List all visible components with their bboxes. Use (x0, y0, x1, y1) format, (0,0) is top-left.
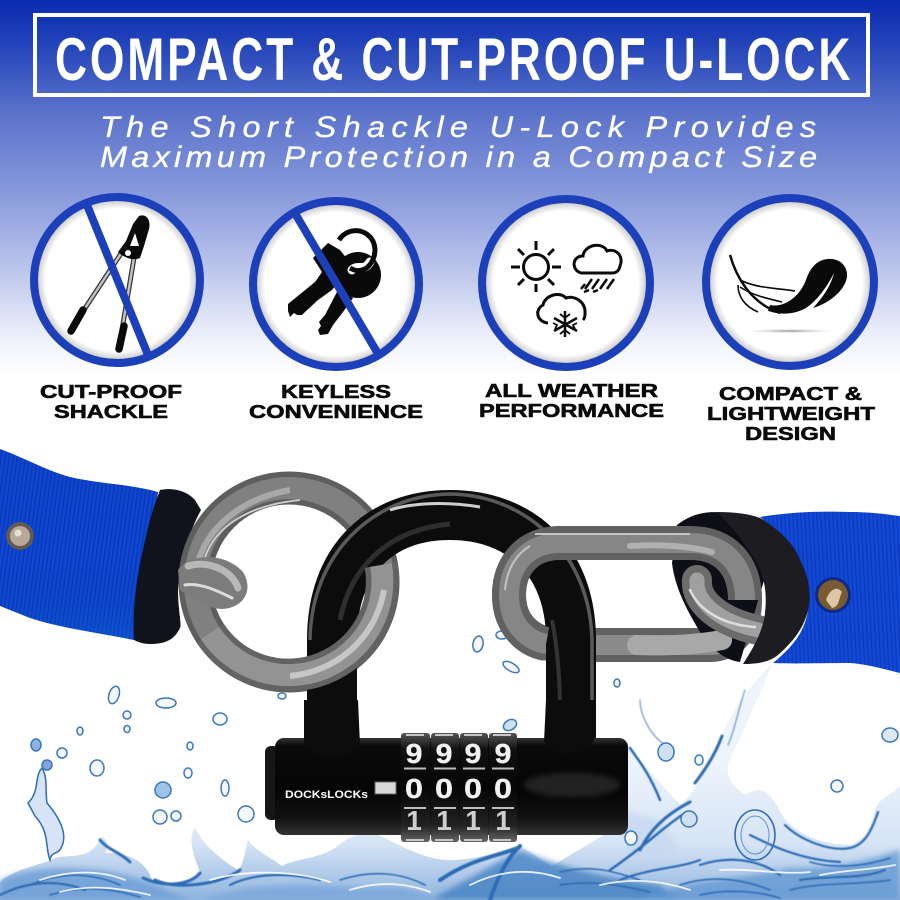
right rivet (815, 577, 851, 613)
background gradient (0, 0, 900, 375)
dial digits: 0 (435, 773, 453, 804)
dial digits: 9 (494, 738, 512, 769)
icon: rain cloud (574, 245, 621, 292)
dial digits: 0 (464, 773, 482, 804)
dials (401, 733, 517, 842)
water droplets (31, 631, 898, 845)
label: cut-proof shackle (40, 382, 182, 422)
label: all weather performance: PERFORMANCE (479, 401, 664, 421)
label: cut-proof shackle: CUT-PROOF (40, 382, 182, 402)
dial digits: 1 (465, 805, 481, 836)
right black cuff, front (717, 512, 810, 664)
left black cuff (133, 489, 201, 644)
water splash (0, 664, 900, 900)
label: compact and lightweight design: DESIGN (745, 424, 836, 444)
dial digits: 0 (494, 773, 512, 804)
icon: feather (706, 198, 874, 366)
dial digits (405, 738, 512, 836)
deep water tones (0, 810, 900, 900)
left rivet (6, 522, 34, 550)
left blue chain sleeve (0, 449, 158, 640)
label: keyless convenience (249, 382, 423, 422)
icon: sun (511, 241, 561, 292)
label: compact and lightweight design: LIGHTWEIGHT (707, 404, 875, 424)
icon: all weather (482, 199, 650, 367)
steel link right, back layer (509, 543, 745, 645)
right black cuff, back (672, 512, 770, 662)
black shackle (310, 494, 592, 762)
dial digits: 9 (464, 738, 482, 769)
label: all weather performance (479, 381, 664, 421)
splash ridges (0, 690, 890, 900)
right blue chain sleeve (760, 512, 900, 673)
label: keyless convenience: KEYLESS (281, 382, 391, 402)
subtitle: The Short Shackle U-Lock Provides (100, 110, 816, 144)
combination lock body (265, 700, 628, 842)
left splash column (28, 768, 64, 860)
indicator window (375, 782, 396, 794)
subtitle (100, 110, 817, 174)
dial digits: 1 (436, 805, 452, 836)
steel ring, front segment (210, 565, 384, 676)
icon: bolt cutters crossed out (34, 197, 200, 363)
dial digits: 1 (406, 805, 422, 836)
third chain link (690, 580, 758, 630)
title banner: COMPACT & CUT-PROOF U-LOCK (55, 27, 851, 94)
dial digits: 1 (495, 805, 511, 836)
icon: keys crossed out (253, 201, 419, 367)
icon: snow cloud (538, 294, 585, 337)
label: all weather performance: ALL WEATHER (485, 381, 658, 401)
label: compact and lightweight design: COMPACT & (719, 384, 862, 404)
dial digits: 9 (436, 738, 452, 769)
label: compact and lightweight design (707, 384, 875, 444)
steel link, front segment (505, 534, 745, 645)
dial digits: 0 (405, 773, 423, 804)
dial digits: 9 (406, 738, 422, 769)
steel ring, back layer (195, 488, 383, 676)
brand text: DOCKsLOCKs (285, 789, 368, 801)
label: keyless convenience: CONVENIENCE (249, 402, 423, 422)
white ripple highlights (40, 865, 895, 895)
label: cut-proof shackle: SHACKLE (54, 402, 168, 422)
subtitle: Maximum Protection in a Compact Size (100, 140, 817, 174)
small chain link inside ring (178, 557, 247, 609)
